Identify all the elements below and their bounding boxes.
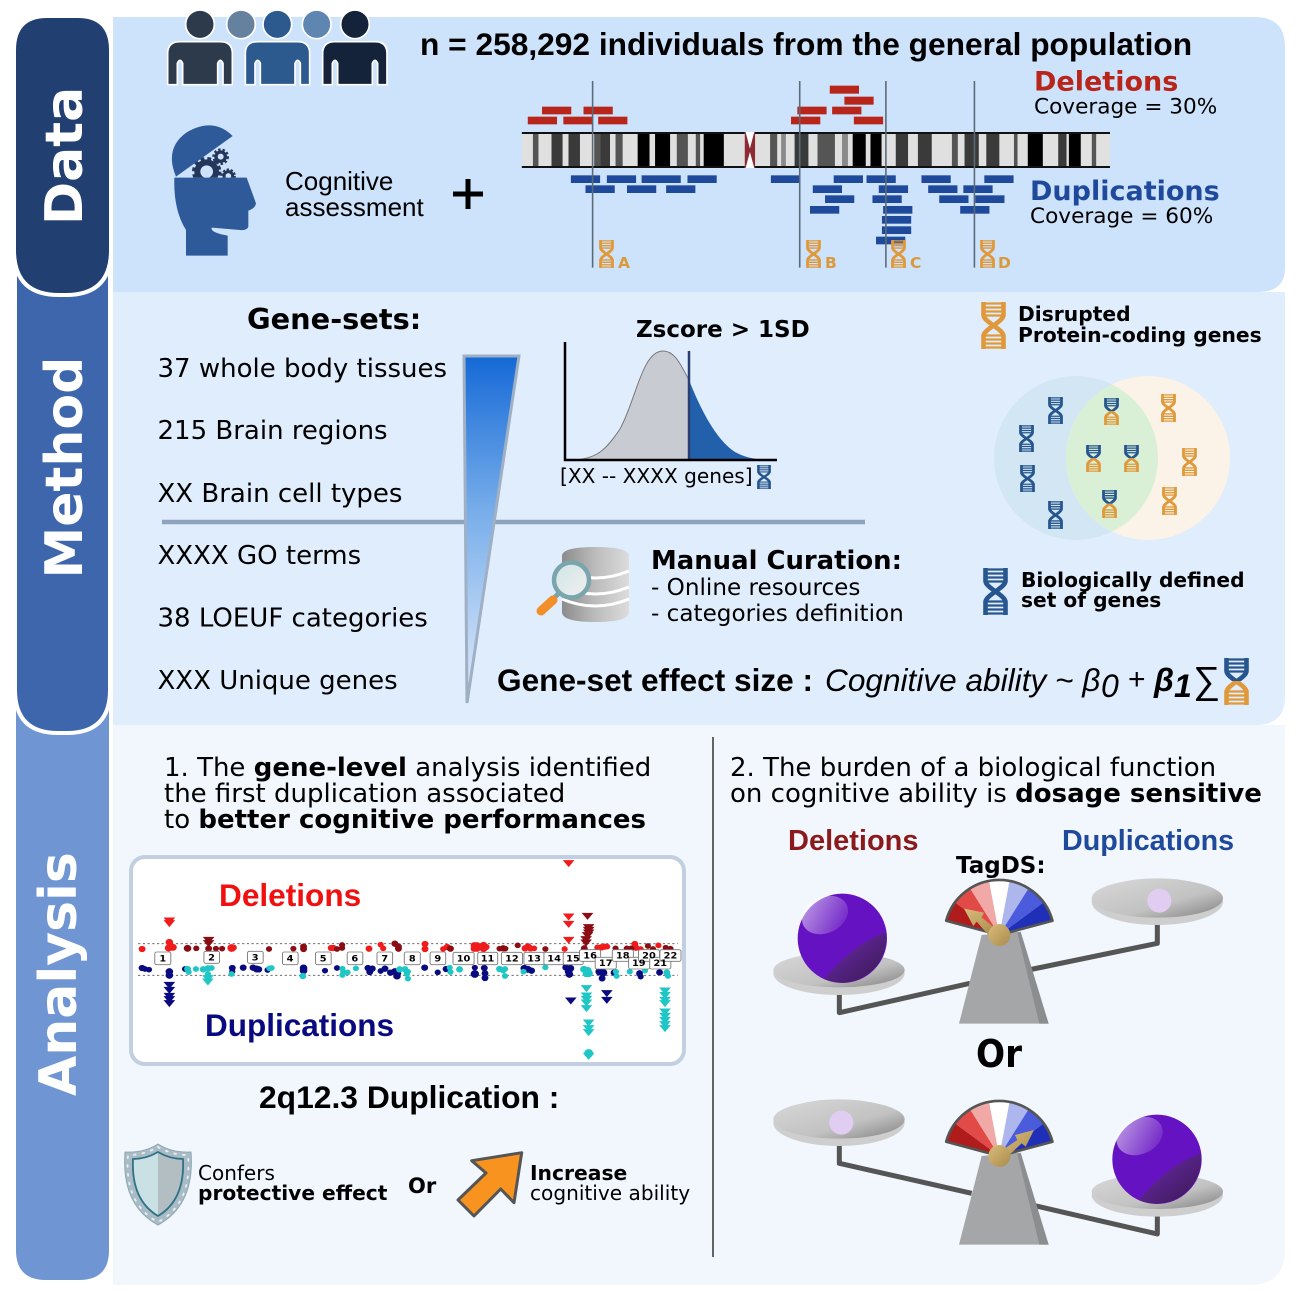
legend: duplications: Coverage = 60% — [1030, 204, 1213, 229]
text: cognitive assessment: assessment — [285, 192, 424, 222]
gene markers A B C D — [600, 240, 1011, 272]
side tab: Method — [15, 270, 110, 733]
legend: disrupted protein-coding genes: Disrupted — [1018, 302, 1131, 326]
gene marker lines — [593, 81, 974, 268]
text: manual curation: - categories definition — [651, 601, 904, 627]
panel: manhattan plot: 5 — [320, 954, 327, 964]
side tab: Method: Method — [35, 357, 95, 578]
panel: analysis background — [113, 725, 1285, 1285]
gene markers A B C D: C — [910, 254, 921, 272]
panel: manhattan plot: 9 — [434, 954, 441, 964]
text: manual curation: Manual Curation: — [651, 546, 902, 576]
panel: manhattan plot: 22 — [664, 951, 677, 961]
legend: biologically defined — [985, 568, 1245, 615]
gene-set list: XX Brain cell types — [158, 479, 402, 509]
legend: disrupted protein-coding genes: Protein-coding genes — [1018, 323, 1262, 347]
deletion bars — [528, 86, 883, 124]
gene-set list: 215 Brain regions — [158, 416, 388, 446]
legend: deletions: Coverage = 30% — [1034, 94, 1217, 120]
gene-set list: 38 LOEUF categories — [158, 604, 428, 634]
legend: deletions: Deletions — [1034, 66, 1178, 98]
duplication points (cyan) — [185, 965, 670, 1059]
formula: 0 — [1101, 668, 1119, 704]
formula: Cognitive ability ~ β — [825, 662, 1100, 698]
gene-set list: 37 whole body tissues — [158, 354, 447, 384]
side tab: Analysis — [16, 700, 109, 1280]
gene-set list: XXX Unique genes — [158, 666, 398, 696]
gene-set list: XXXX GO terms — [158, 541, 361, 571]
panel: method background — [113, 292, 1285, 725]
text: cognitive assessment: Cognitive — [285, 166, 393, 196]
panel: manhattan plot: 6 — [351, 954, 359, 964]
heading: deletions vs duplications — [788, 825, 1234, 857]
deletion points (dark red) — [184, 913, 673, 952]
icon: database with magnifier — [541, 547, 629, 622]
icon: head with gears — [172, 125, 256, 256]
text: manual curation: - Online resources — [651, 575, 860, 601]
text: finding 1: the first duplication associated — [164, 779, 565, 809]
side tab: Analysis: Analysis — [29, 852, 89, 1096]
legend: duplications: Duplications — [1030, 176, 1220, 207]
formula — [497, 658, 1247, 705]
text: or: Or — [408, 1174, 437, 1198]
text: increase cognitive ability: cognitive ability — [530, 1181, 690, 1205]
panel: manhattan plot: 11 — [481, 954, 494, 965]
duplication bars — [571, 175, 1014, 244]
venn diagram — [994, 376, 1230, 540]
panel: manhattan plot: Deletions — [219, 877, 361, 913]
icon: orange arrow — [458, 1153, 522, 1216]
panel: manhattan plot: 13 — [527, 954, 541, 965]
icon: shield — [125, 1144, 191, 1225]
text: finding 2: 2. The burden of a biological function — [730, 753, 1216, 783]
heading: 2q12.3 duplication: 2q12.3 Duplication : — [259, 1079, 559, 1115]
panel: manhattan plot: 21 — [653, 958, 667, 969]
heading: Zscore: Zscore > 1SD — [636, 317, 810, 343]
panel: manhattan plot: 16 — [583, 951, 597, 961]
text: finding 1: 1. The gene-level analysis identified — [164, 753, 651, 783]
formula: Gene-set effect size : — [497, 662, 813, 698]
icon: group of people — [168, 10, 387, 85]
legend: disrupted protein-coding genes — [983, 302, 1262, 349]
balance: tilted to duplications — [773, 1099, 1223, 1245]
panel: manhattan plot: 15 — [566, 954, 580, 965]
text: protective effect: protective effect — [198, 1181, 388, 1205]
panel: manhattan plot: 17 — [599, 958, 613, 969]
text: or (balances): Or — [976, 1032, 1022, 1076]
chart axis label: [XX -- XXXX genes] — [560, 464, 753, 488]
gene markers A B C D: B — [825, 254, 837, 272]
panel: manhattan plot: 20 — [642, 951, 656, 961]
chromosome labels — [155, 950, 681, 969]
legend: deletions — [1034, 66, 1217, 120]
side tab: Data — [14, 16, 111, 295]
plus sign — [453, 179, 483, 209]
panel: manhattan plot — [131, 857, 684, 1064]
panel: manhattan plot: 14 — [547, 954, 561, 965]
heading: gene-sets: Gene-sets: — [247, 302, 421, 336]
text: finding 2: on cognitive ability is dosage sensitive — [730, 779, 1262, 809]
panel: manhattan plot: 4 — [287, 954, 294, 964]
panel: manhattan plot: 18 — [616, 951, 630, 961]
panel: manhattan plot: 1 — [159, 954, 166, 964]
duplication points (navy) — [139, 965, 662, 1006]
chromosome with CNV bars — [522, 81, 1110, 268]
text: protective effect: Confers — [198, 1161, 275, 1185]
distribution chart — [565, 342, 777, 460]
text: increase cognitive ability: Increase — [530, 1161, 627, 1185]
formula: + — [1128, 663, 1146, 696]
heading: deletions vs duplications: Duplications — [1062, 825, 1234, 857]
panel: manhattan plot: 7 — [381, 954, 388, 964]
panel: manhattan plot: 3 — [252, 953, 259, 963]
formula: β — [1153, 662, 1174, 698]
panel: manhattan plot: 8 — [409, 954, 416, 964]
legend: biologically defined: Biologically defined — [1021, 568, 1245, 592]
heading: deletions vs duplications: Deletions — [788, 825, 919, 857]
formula: 1 — [1174, 668, 1192, 704]
legend: biologically defined: set of genes — [1021, 588, 1161, 612]
panel: manhattan plot: 12 — [505, 954, 519, 965]
legend: duplications — [1030, 176, 1220, 229]
panel: manhattan plot: Duplications — [205, 1007, 394, 1043]
side tab: Data: Data — [35, 87, 95, 225]
panel: manhattan plot: 19 — [632, 958, 646, 969]
balance: tilted to deletions — [773, 878, 1223, 1024]
deletion points (red) — [139, 861, 661, 952]
text: manual curation — [651, 546, 904, 627]
chromosome bands — [522, 132, 1110, 168]
title: n = 258,292 individuals from the general population — [420, 26, 1192, 62]
panel: data background — [113, 17, 1285, 292]
panel: manhattan plot: 2 — [208, 953, 215, 963]
gene markers A B C D: A — [618, 254, 630, 272]
panel: manhattan plot: 10 — [457, 954, 471, 965]
funnel — [464, 356, 519, 703]
label: TagDS: TagDS: — [956, 853, 1046, 879]
text: finding 1: to better cognitive performances — [164, 805, 646, 835]
gene markers A B C D: D — [998, 254, 1011, 272]
gene-set list — [158, 354, 447, 696]
formula: ∑ — [1193, 660, 1220, 702]
